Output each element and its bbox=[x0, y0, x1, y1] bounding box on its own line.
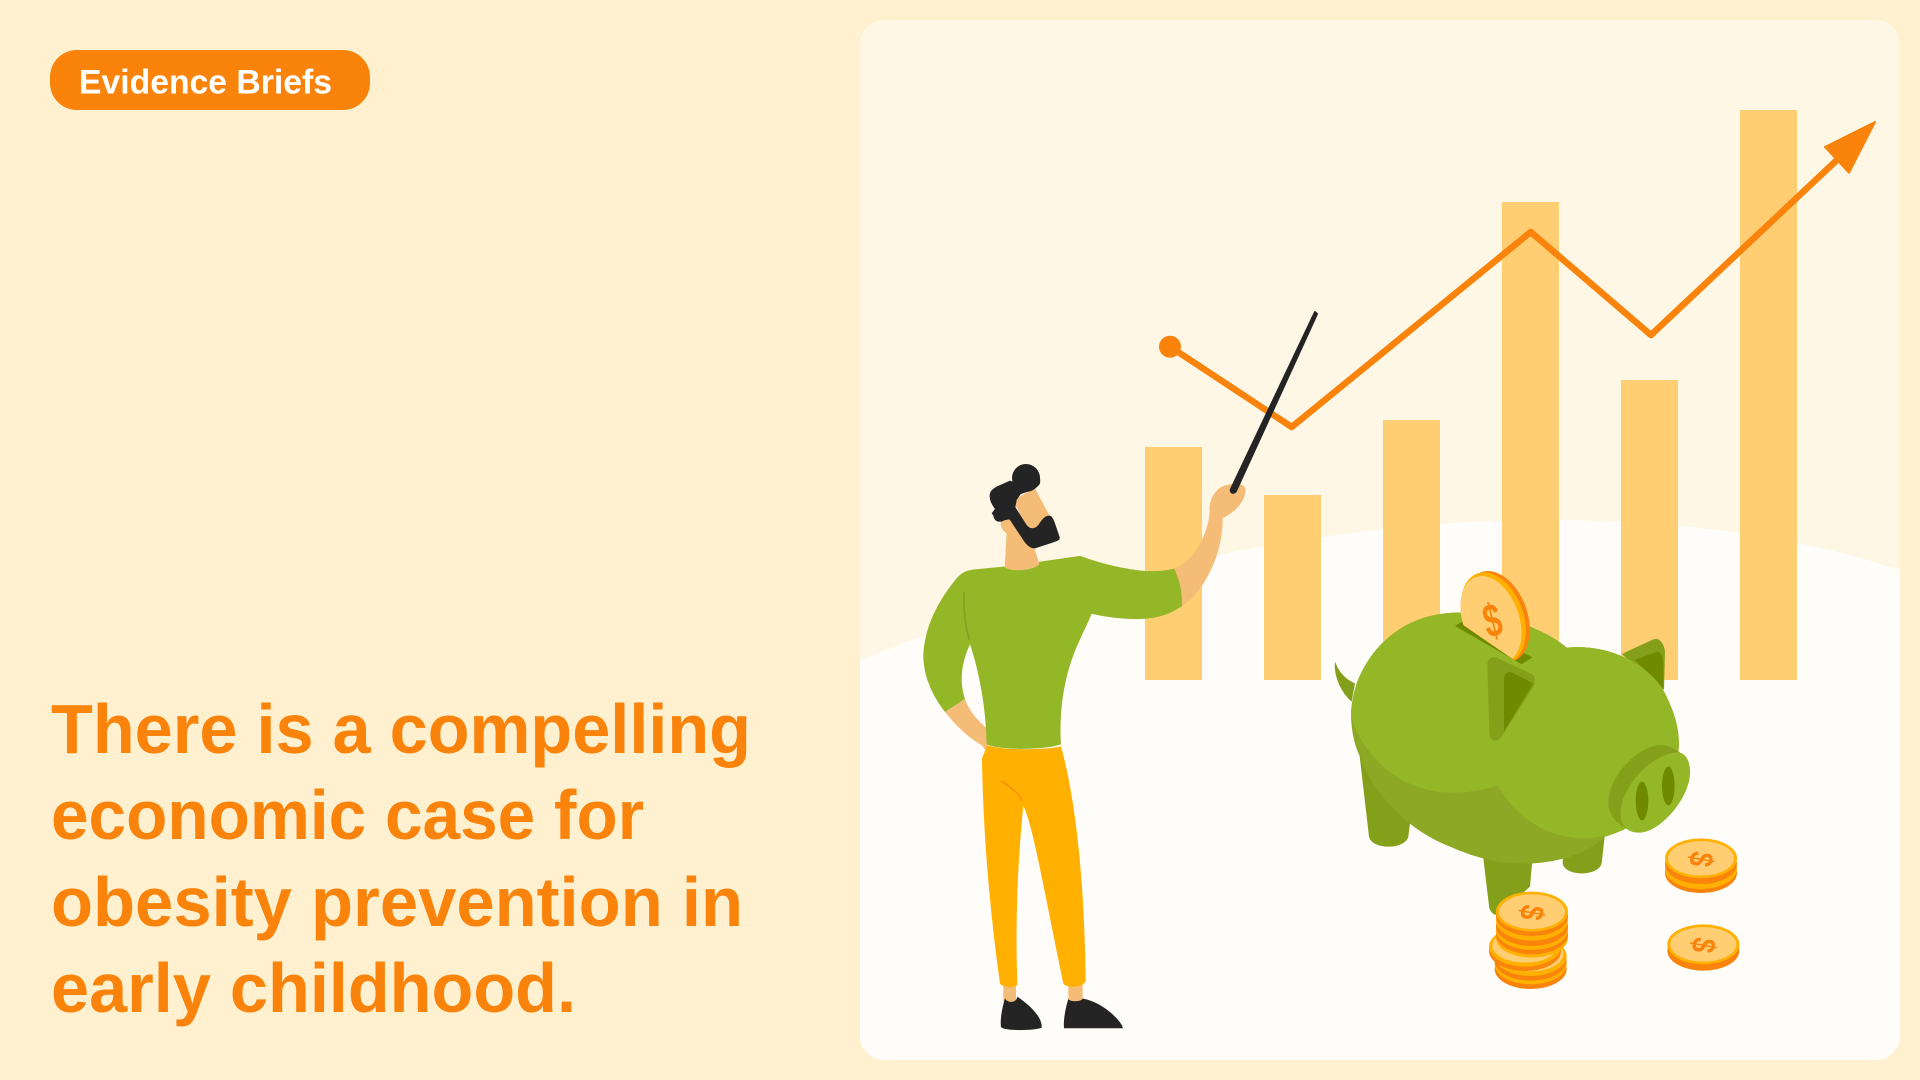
coin entering slot: $ bbox=[1478, 594, 1507, 649]
pig legs bbox=[1359, 753, 1605, 915]
pig ear near bbox=[1487, 657, 1535, 741]
pig far ear bbox=[1622, 639, 1665, 690]
heading: economic case statement: There is a compelling bbox=[51, 690, 751, 768]
coins pair: $ bbox=[1681, 849, 1720, 870]
trend line with arrow bbox=[1159, 122, 1875, 427]
bar chart bbox=[1145, 110, 1797, 680]
pointer stick bbox=[1231, 312, 1317, 493]
heading: economic case statement: economic case for bbox=[51, 776, 644, 854]
piggy bank with coins bbox=[1335, 562, 1739, 989]
pig tail bbox=[1335, 662, 1355, 702]
panel: illustration bbox=[860, 20, 1900, 1060]
man body and clothes bbox=[923, 484, 1246, 1030]
coin stack bbox=[1489, 892, 1568, 989]
single coin: $ bbox=[1683, 935, 1723, 956]
figure: man pointing at chart bbox=[923, 312, 1317, 1030]
badge: Evidence Briefs bbox=[50, 50, 370, 110]
single coin bbox=[1667, 924, 1739, 971]
man head bbox=[990, 464, 1060, 570]
pig body bbox=[1351, 613, 1679, 864]
heading: economic case statement bbox=[51, 690, 751, 1027]
pig snout bbox=[1608, 745, 1690, 833]
coin stack: $ bbox=[1511, 902, 1551, 923]
coins pair bbox=[1665, 838, 1737, 893]
coin entering slot bbox=[1460, 571, 1530, 660]
coin slot bbox=[1455, 621, 1532, 664]
heading: economic case statement: obesity prevention in bbox=[51, 863, 743, 941]
badge: Evidence Briefs: Evidence Briefs bbox=[79, 64, 332, 102]
heading: economic case statement: early childhood. bbox=[51, 949, 576, 1027]
